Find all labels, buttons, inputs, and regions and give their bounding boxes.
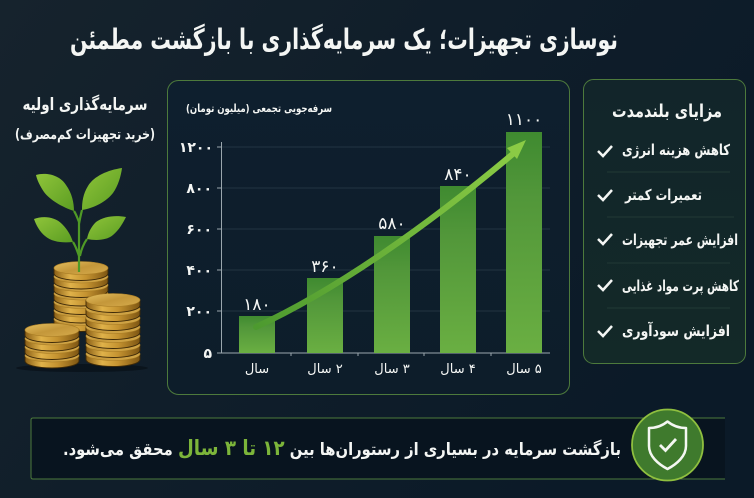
heading: initial investment: سرمایه‌گذاری اولیه bbox=[22, 94, 148, 115]
bar: year 1 bbox=[239, 295, 275, 377]
bar: year 3 bbox=[374, 214, 410, 377]
y axis labels: ۲۰۰ bbox=[186, 304, 212, 320]
chart title: سرفه‌جویی تجمعی (میلیون تومان) bbox=[186, 102, 332, 115]
bar: year 4 bbox=[440, 165, 476, 377]
y axis labels: ۵ bbox=[203, 346, 212, 362]
bar: year 1: سال bbox=[245, 362, 269, 377]
subheading: low-consumption equipment: (خرید تجهیزات کم‌مصرف) bbox=[15, 127, 155, 143]
right coin stack bbox=[86, 294, 140, 366]
bar: year 4: ۴ سال bbox=[440, 362, 476, 377]
panel: long-term benefits bbox=[584, 80, 746, 364]
y axis labels: ۸۰۰ bbox=[186, 181, 212, 197]
bar: year 4: ۸۴۰ bbox=[444, 165, 472, 185]
panel: cumulative savings chart bbox=[168, 80, 570, 394]
y axis labels: ۱۲۰۰ bbox=[179, 140, 213, 156]
benefit: energy cost bbox=[598, 141, 730, 159]
benefit: fewer repairs bbox=[598, 186, 702, 204]
bar: year 5: ۱۱۰۰ bbox=[506, 110, 542, 130]
centre coin stack bbox=[54, 262, 108, 332]
leaf lower left bbox=[34, 217, 73, 242]
leaf lower right bbox=[87, 216, 126, 240]
bar: year 1: ۱۸۰ bbox=[243, 295, 271, 315]
bar: year 2: ۲ سال bbox=[307, 362, 343, 377]
y axis labels: ۴۰۰ bbox=[186, 263, 212, 279]
icon: coin stacks with plant bbox=[16, 168, 148, 372]
bar: year 3: ۵۸۰ bbox=[378, 214, 406, 234]
y axis labels bbox=[179, 140, 213, 362]
callout: payback period bbox=[31, 410, 725, 480]
growth arrow bbox=[256, 140, 526, 327]
bar: year 2: ۳۶۰ bbox=[311, 257, 339, 277]
leaf upper right bbox=[82, 168, 122, 210]
panel: initial investment bbox=[15, 94, 155, 372]
bar: year 5 bbox=[506, 110, 542, 377]
bar: year 5: ۵ سال bbox=[506, 362, 542, 377]
icon: shield badge bbox=[632, 410, 703, 480]
bar: year 2 bbox=[307, 257, 343, 377]
benefit: fewer repairs: تعمیرات کمتر bbox=[624, 186, 702, 204]
callout text: بازگشت سرمایه در بسیاری از رستوران‌ها بین ۱۲ تا ۳ سال محقق می‌شود. bbox=[63, 436, 621, 460]
y axis labels: ۶۰۰ bbox=[186, 222, 212, 238]
left coin stack bbox=[25, 324, 79, 368]
bar: year 3: ۳ سال bbox=[374, 362, 410, 377]
benefit: profitability: افزایش سودآوری bbox=[622, 322, 730, 340]
benefits heading: مزایای بلندمدت bbox=[612, 101, 722, 122]
plant stem bbox=[73, 210, 87, 272]
leaf upper left bbox=[36, 174, 74, 211]
